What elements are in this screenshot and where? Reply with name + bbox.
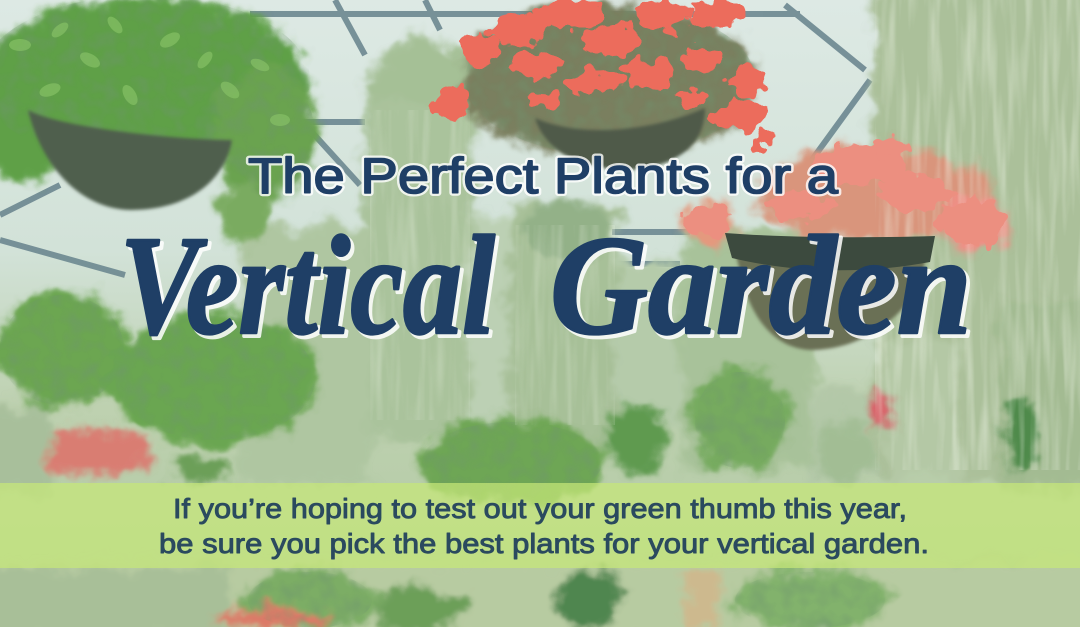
texture: hanging strand streaks [370,0,1080,470]
banner: intro band [0,483,1080,568]
heading: Vertical Garden: Garden [553,209,975,367]
hanging strands: right [872,0,1080,627]
plants: bottom strip [0,560,1080,627]
plant: top-centre foliage [460,2,760,158]
icon: top-centre hanging basket [535,108,705,170]
icon: top-left hanging basket [28,110,232,210]
plant: top-left foliage [0,0,317,247]
heading: Vertical Garden [120,206,975,367]
banner text: If you’re hoping to test out your green thumb this year, [173,493,907,524]
banner text [159,493,929,559]
heading: Vertical Garden: Vertical [120,206,495,364]
plants: lower centre [417,368,1042,506]
heading: Vertical Garden: Garden [550,206,972,364]
greenhouse roof struts [0,0,870,275]
hanging strands: centre [240,38,880,485]
icon: right hanging basket [725,233,935,350]
leaves: top-left plant [9,14,290,126]
banner text: be sure you pick the best plants for your vertical garden. [159,528,929,559]
flowers: right pink begonias [684,138,1004,246]
heading: The Perfect Plants for a: The Perfect Plants for a [248,148,838,204]
heading: The Perfect Plants for a: The Perfect Plants for a [248,148,838,204]
plants: left green balls [0,292,320,495]
heading: Vertical Garden: Vertical [123,209,498,367]
flowers: top-centre red begonias [434,0,775,150]
plant: right foliage [682,147,1007,253]
